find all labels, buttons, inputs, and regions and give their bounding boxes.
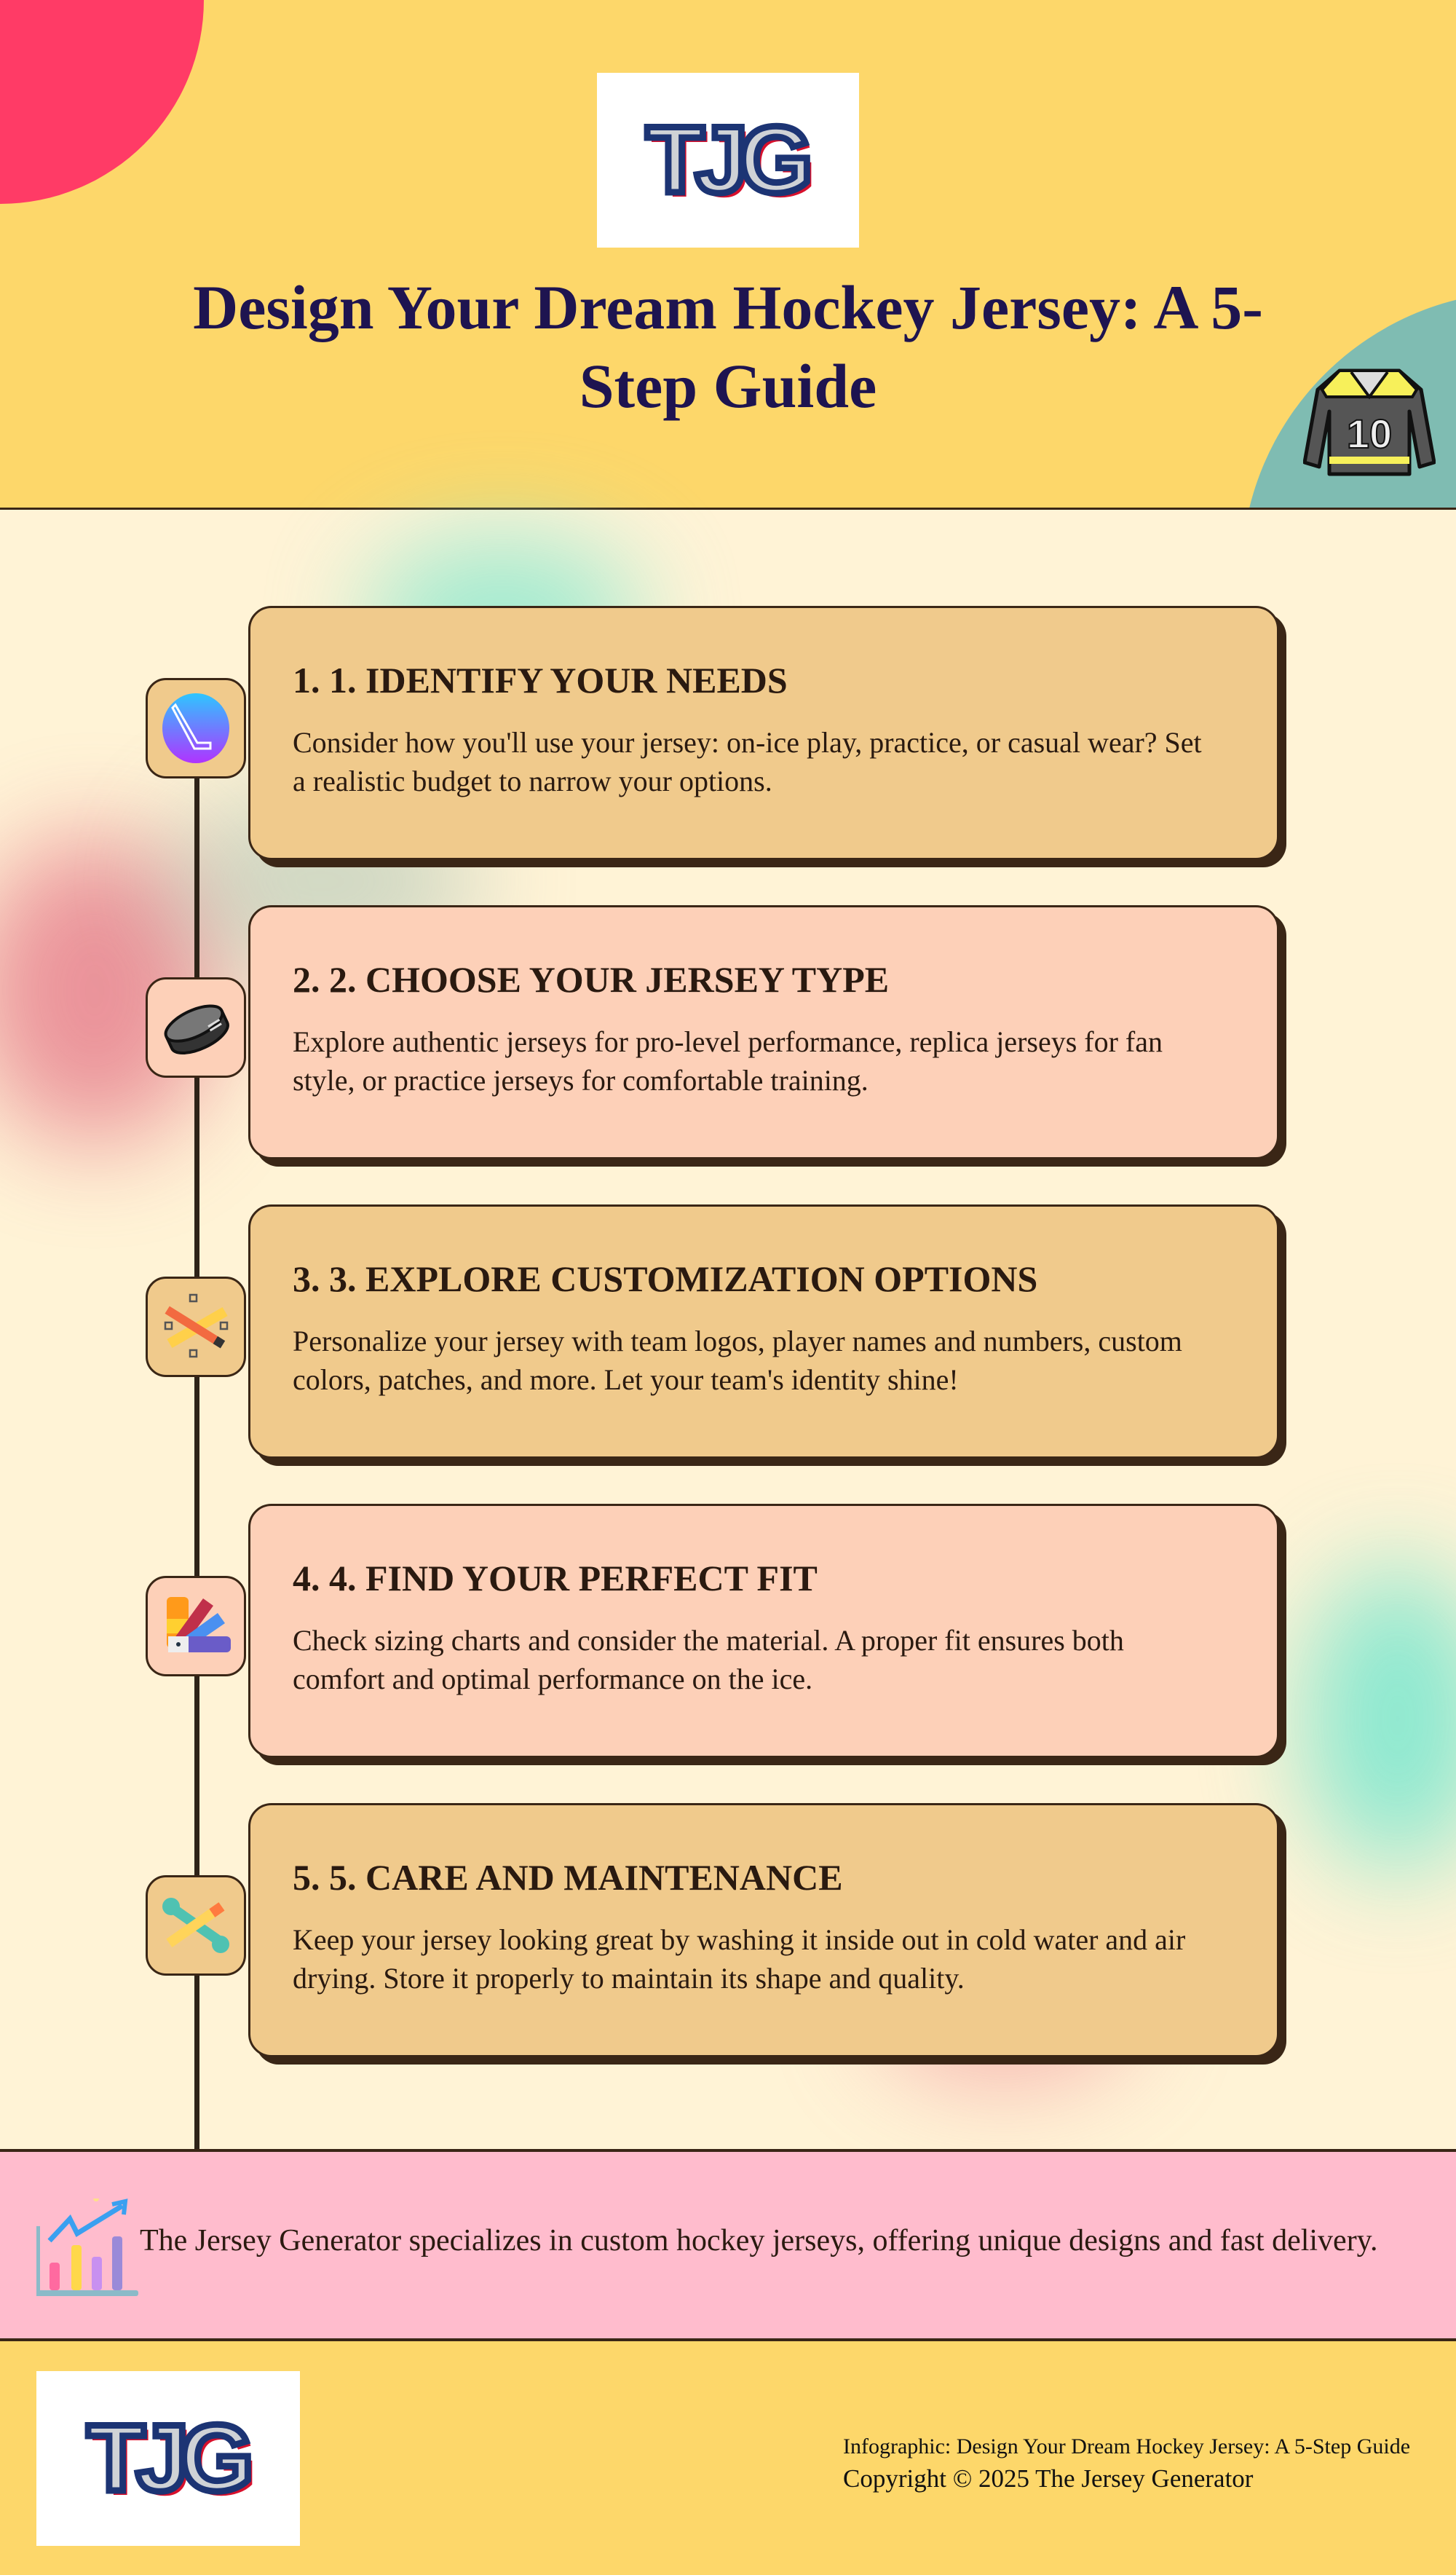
icon: hockey jersey: 10 [1347,411,1392,457]
card 5: 5. 5. CARE AND MAINTENANCE [293,1857,843,1898]
about section [0,2149,1456,2341]
card 4: 4. 4. FIND YOUR PERFECT FIT [293,1558,818,1598]
logo footer: TJG [87,2405,248,2511]
footer [0,2341,1456,2575]
card 5: drying. Store it properly to maintain its shape and quality. [293,1962,965,1995]
icon: wrench and pencil [146,1875,246,1976]
decoration: teal circle [1241,291,1456,859]
title: Step Guide [579,351,877,421]
timeline line [194,776,199,2152]
card 3: Personalize your jersey with team logos, player names and numbers, custom [293,1325,1182,1357]
logo footer: TJG [92,2409,253,2515]
icon: color swatches [146,1576,246,1676]
card 2 [248,905,1279,1159]
step 4 [146,1504,1286,1765]
footer credits [843,2434,1410,2493]
card 1: 1. 1. IDENTIFY YOUR NEEDS [293,660,788,701]
step 5 [146,1803,1286,2065]
card 4: Check sizing charts and consider the material. A proper fit ensures both [293,1624,1124,1657]
footer credits: Copyright © 2025 The Jersey Generator [843,2464,1253,2493]
card 3 [248,1204,1279,1459]
footer credits: Infographic: Design Your Dream Hockey Jersey: A 5-Step Guide [843,2434,1410,2458]
logo footer [36,2371,300,2546]
logo top: TJG [646,106,807,213]
card 5 [248,1803,1279,2057]
card 1: Consider how you'll use your jersey: on-ice play, practice, or casual wear? Set [293,726,1202,759]
decoration: pink circle [0,0,204,204]
card 1 [248,606,1279,860]
header [0,0,1456,510]
card 3: 3. 3. EXPLORE CUSTOMIZATION OPTIONS [293,1258,1037,1299]
icon: puck [146,977,246,1078]
card 1: a realistic budget to narrow your options. [293,765,772,797]
logo top [597,73,859,248]
card 5: Keep your jersey looking great by washing it inside out in cold water and air [293,1923,1185,1956]
step 3 [146,1204,1286,1466]
logo top: TJG [651,111,812,217]
title [193,272,1263,421]
card 2: Explore authentic jerseys for pro-level performance, replica jerseys for fan [293,1025,1163,1058]
card 3: colors, patches, and more. Let your team's identity shine! [293,1363,959,1396]
card 2: 2. 2. CHOOSE YOUR JERSEY TYPE [293,959,889,1000]
step 2 [146,905,1286,1167]
step 1 [146,606,1286,867]
icon: chart [36,2199,138,2296]
icon: hockey stick [146,678,246,778]
icon: pencil and ruler [146,1277,246,1377]
icon: hockey jersey [1303,368,1436,476]
card 2: style, or practice jerseys for comfortable training. [293,1064,869,1097]
background blobs [364,539,641,699]
card 4 [248,1504,1279,1758]
about text: The Jersey Generator specializes in custom hockey jerseys, offering unique designs and fast delivery. [140,2224,1377,2257]
title: Design Your Dream Hockey Jersey: A 5- [193,272,1263,342]
card 4: comfort and optimal performance on the ice. [293,1663,812,1695]
